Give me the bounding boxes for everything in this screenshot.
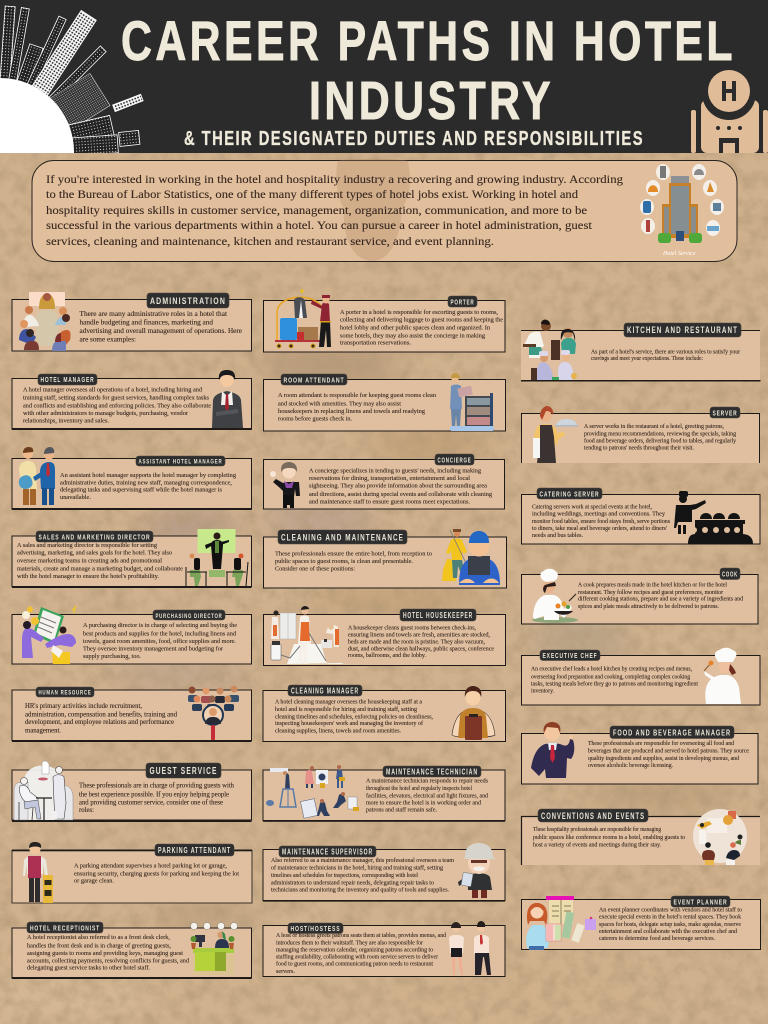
icon: meeting circle — [693, 809, 747, 865]
label — [540, 650, 600, 660]
text: A room attendant is responsible for keeping guest rooms clean — [278, 392, 437, 399]
text: training staff, setting standards for guest services, handling complex tasks — [23, 394, 210, 401]
text — [74, 863, 239, 885]
text: ensuring linens and towels are fresh, amenities are stocked, — [348, 632, 490, 639]
icon: planner with schedules — [526, 896, 596, 950]
panel: cleaning and maintenance — [264, 529, 506, 588]
icon: line-art cafe scene — [14, 761, 73, 820]
icon: meeting table — [19, 292, 71, 351]
text: and directions, assist during special events and collaborate with cleaning — [309, 491, 493, 498]
text: spaces for hosts, delegate setup tasks, make agendas, reserve — [599, 921, 741, 928]
text — [578, 582, 743, 610]
label: MAINTENANCE SUPERVISOR — [282, 848, 373, 856]
label: COOK — [722, 570, 738, 579]
text: overseeing food preparation and cooking, completing complex cooking — [531, 673, 690, 680]
panel: kitchen and restaurant — [521, 320, 760, 382]
label — [537, 488, 602, 499]
text: quality ingredients and supplies, assist in developing menus, and — [588, 755, 740, 762]
icon: cook with wok — [532, 569, 578, 623]
text: throughout the hotel and regularly inspects hotel — [366, 785, 472, 792]
text: with other administrators to manage budgets, purchasing, vendor — [23, 410, 188, 417]
text: collecting and delivering luggage to guest rooms and keeping the — [340, 316, 503, 323]
text: A cook prepares meals made in the hotel kitchen or for the hotel — [578, 582, 727, 589]
text: beverages that are produced and served to hotel patrons. They source — [588, 748, 749, 755]
panel: hotel manager — [12, 370, 252, 430]
label — [624, 323, 741, 337]
panel: maintenance technician — [263, 765, 505, 822]
text: staffing availability, collaborating with room service servers to deliver — [276, 954, 438, 961]
label: PORTER — [450, 297, 474, 306]
text: roles: — [79, 807, 94, 814]
icon: catering silhouette — [674, 491, 753, 544]
text: delegating tasks and supervising staff while the hotel manager is — [60, 487, 223, 494]
panel: guest service — [12, 761, 252, 822]
text: different cooking stations, prepare and use a variety of ingredients and — [578, 596, 743, 603]
label: HOTEL HOUSEKEEPER — [403, 611, 473, 620]
label: CLEANING MANAGER — [291, 686, 359, 696]
label: PARKING ATTENDANT — [158, 846, 231, 855]
panel: host and hostess — [263, 921, 505, 976]
icon: candidates and magnifier — [188, 686, 239, 740]
icon: technicians at work — [266, 765, 359, 818]
text: or garage clean. — [74, 878, 114, 885]
text — [348, 624, 494, 659]
text: handle budgeting and finances, marketing and — [80, 319, 214, 326]
panel: hotel housekeeper — [264, 606, 506, 666]
text — [591, 348, 740, 362]
icon: supervisor in hard hat — [458, 843, 496, 898]
label: MAINTENANCE TECHNICIAN — [386, 768, 478, 776]
panel: cook — [522, 568, 758, 624]
text: including weddings, meetings and conventions. They — [532, 511, 665, 517]
icon: manager — [212, 370, 243, 428]
label: HOST/HOSTESS — [290, 924, 340, 933]
label: EXECUTIVE CHEF — [542, 651, 598, 660]
text: cleaning timelines and schedules, enforcing policies on cleanliness, — [275, 714, 433, 721]
text: As part of a hotel's service, there are various roles to satisfy your — [591, 348, 740, 355]
label: PURCHASING DIRECTOR — [156, 613, 222, 620]
text: Catering servers work at special events at the hotel, — [532, 505, 652, 511]
label — [278, 530, 407, 544]
text — [533, 826, 685, 848]
intro text — [46, 173, 623, 248]
panel: conventions and events — [521, 809, 760, 865]
label — [400, 609, 476, 621]
label — [383, 766, 481, 777]
panel: administration — [12, 292, 252, 351]
panel: parking attendant — [12, 842, 252, 903]
text — [276, 932, 447, 975]
label — [36, 531, 153, 542]
label: CATERING SERVER — [540, 489, 600, 498]
label: ADMINISTRATION — [150, 296, 226, 307]
text: handles the front desk and is in charge of greeting guests, — [27, 942, 171, 949]
text — [584, 423, 736, 451]
text: hotel and is responsible for hiring and training staff, setting — [275, 706, 417, 713]
label: HOTEL MANAGER — [40, 375, 94, 384]
text — [309, 467, 493, 506]
text — [275, 551, 432, 572]
text: inventory. — [531, 688, 554, 694]
icon: presenter with audience — [186, 529, 248, 586]
text: advertising and overall management of operations. Here — [80, 328, 242, 335]
label — [288, 923, 343, 934]
label: HOTEL RECEPTIONIST — [30, 923, 100, 932]
panel: room attendant — [264, 373, 506, 431]
text: needs and bus tables. — [532, 533, 584, 539]
intro text: hospitality requires skills in customer service, management, organization, communication, and more to be — [46, 204, 587, 217]
text: Consider one of these positions: — [275, 565, 355, 572]
label — [281, 374, 347, 385]
text: oversee marketing teams in creating ads and promotional — [17, 558, 162, 565]
icon: hotel building — [691, 66, 768, 153]
text — [17, 542, 183, 580]
text: An executive chef leads a hotel kitchen by creating recipes and menus, — [531, 666, 692, 673]
text: public spaces like conference rooms in a hotel, enabling guests to — [533, 834, 685, 841]
text: A server works in the restaurant of a hotel, greeting patrons, — [584, 423, 724, 430]
label — [610, 726, 734, 738]
icon: housekeeping scene — [271, 606, 344, 664]
text: They oversee inventory management and budgeting for — [83, 645, 224, 652]
label — [435, 454, 474, 465]
text: execute special events in the hotel's rental spaces. They book — [599, 914, 742, 921]
text: administrators to understand repair needs, delegating repair tasks to — [271, 879, 434, 886]
text: hotel lobby and other public spaces clean and organized. In — [340, 325, 491, 332]
text: entertainment and collaborate with the executive chef and — [599, 928, 738, 935]
panel: hotel receptionist — [12, 922, 252, 979]
text: public spaces to guest rooms, is clean and presentable. — [275, 558, 413, 565]
text: tending to patrons' needs throughout their visit. — [584, 445, 694, 451]
panel: sales and marketing director — [12, 529, 252, 588]
panel: assistant hotel manager — [12, 447, 252, 510]
text: A housekeeper cleans guest rooms between check-ins, — [348, 624, 476, 631]
text: are some examples: — [80, 337, 136, 344]
text: unavailable. — [60, 494, 91, 501]
icon: hotel with service icons — [640, 164, 724, 257]
text: patrons and staff remain safe. — [366, 806, 437, 813]
label — [27, 922, 103, 933]
text: assigning guests to rooms and providing keys, managing guest — [27, 950, 183, 957]
panel: concierge — [264, 454, 504, 509]
text: A sales and marketing director is responsible for setting — [17, 542, 157, 549]
text — [366, 778, 489, 813]
icon: hotel with service icons: Hotel Service — [662, 251, 696, 257]
text: the best experience possible. If you enjoy helping people — [79, 791, 229, 798]
label — [153, 610, 225, 620]
text: servers. — [276, 968, 295, 975]
label — [155, 844, 234, 856]
text — [340, 309, 503, 347]
panel: maintenance supervisor — [263, 843, 505, 902]
label — [146, 763, 221, 778]
text: host a variety of events and meetings during their stay. — [533, 841, 661, 848]
text: administrative duties, training new staff, managing correspondence, — [60, 479, 232, 486]
header band — [0, 0, 768, 153]
text — [60, 472, 236, 501]
label — [448, 296, 477, 307]
text: and maintenance staff to ensure guest rooms meet expectations. — [309, 499, 470, 506]
label: HUMAN RESOURCE — [38, 690, 92, 697]
label: CONCIERGE — [438, 455, 472, 464]
text: beds are made and the room is pristine. They also vacuum, — [348, 638, 485, 645]
icon: waitress with cloche — [533, 406, 578, 463]
text: dust, and otherwise clean hallways, public spaces, conference — [348, 645, 494, 652]
text: ensuring security, charging guests for parking and keeping the lot — [74, 870, 239, 877]
text: towels, guest room amenities, food, office supplies and more. — [83, 638, 236, 645]
text: These professionals ensure the entire hotel, from reception to — [275, 551, 432, 558]
text: restaurant. They follow recipes and guest preferences, monitor — [578, 589, 723, 596]
title — [121, 9, 736, 131]
text: accounts, collecting payments, resolving conflicts for guests, and — [27, 957, 190, 964]
text — [599, 906, 742, 942]
text: and stocked with amenities. They may also assist — [278, 400, 401, 407]
label: CLEANING AND MAINTENANCE — [281, 532, 404, 543]
text: transportation reservations. — [340, 340, 411, 347]
text: providing menu recommendations, reviewing the specials, taking — [584, 431, 736, 437]
panel: cleaning manager — [263, 685, 506, 742]
text: A porter in a hotel is responsible for escorting guests to rooms, — [340, 309, 498, 316]
icon: porter with luggage cart — [275, 289, 331, 348]
text: cravings and meet your expectations. These include: — [591, 356, 703, 362]
text: of maintenance technicians in the hotel, hiring and training staff, setting — [271, 865, 443, 872]
label — [279, 846, 376, 857]
text: food to guest rooms, and communicating patron needs to restaurant — [276, 961, 433, 968]
text: caterers to determine food and beverage services. — [599, 935, 715, 942]
text: spices and plate meals attractively to be delivered to patrons. — [578, 604, 719, 610]
icon: host and hostess — [449, 921, 491, 975]
text: delegating guest service tasks to other hotel staff. — [27, 965, 150, 972]
text: These professionals are in charge of providing guests with — [79, 783, 235, 790]
intro text: If you're interested in working in the hotel and hospitality industry a recovering and growing industry. According — [46, 173, 623, 186]
text — [278, 392, 437, 422]
text: Also referred to as a maintenance manager, this professional oversees a team — [271, 857, 454, 864]
text: A hotel receptionist also referred to as a front desk clerk, — [27, 934, 170, 941]
icon: cleaners — [442, 529, 500, 585]
label: ROOM ATTENDANT — [284, 375, 344, 384]
text: managing the reservation calendar, organizing patrons according to — [276, 947, 433, 954]
label — [288, 685, 362, 696]
label — [720, 568, 740, 580]
text: best products and supplies for the hotel, including linens and — [83, 630, 237, 637]
text: monitor food tables, ensure food stays fresh, serve portions — [532, 518, 671, 525]
panel: executive chef — [522, 648, 760, 705]
text: supply purchasing, too. — [83, 653, 141, 660]
text: There are many administrative roles in a hotel that — [80, 311, 227, 318]
text: advertising, marketing, and sales goals for the hotel. They also — [17, 550, 172, 557]
text: An event planner coordinates with vendors and hotel staff to — [599, 906, 742, 913]
text: materials, create and manage a marketing budget, and collaborate — [17, 565, 183, 572]
panel: human resource — [12, 686, 252, 742]
label — [671, 896, 730, 907]
icon: kitchen staff — [523, 320, 577, 380]
text: These professionals are responsible for overseeing all food and — [588, 740, 735, 747]
icon: handshake with contract — [22, 605, 77, 664]
panel: event planner — [522, 896, 760, 950]
icon: city skyline on globe — [0, 6, 144, 153]
intro text: services, cleaning and maintenance, kitchen and restaurant service, and event planning. — [46, 235, 494, 248]
title: INDUSTRY — [309, 71, 554, 131]
icon: reception desk — [190, 922, 238, 975]
text — [27, 934, 190, 972]
text: technicians and monitoring the inventory and quality of tools and supplies. — [271, 886, 449, 893]
text — [275, 699, 433, 735]
panel: porter — [264, 289, 505, 352]
text: timelines and schedules for inspections, corresponding with hotel — [271, 872, 418, 879]
icon: concierge — [270, 462, 300, 508]
text — [532, 505, 671, 539]
text: administration, compensation and benefits, training and — [25, 711, 178, 718]
text — [23, 387, 211, 425]
text — [83, 622, 237, 660]
text: food and beverage orders, delivering food to tables, and regularly — [584, 437, 736, 444]
text — [79, 783, 235, 814]
label — [136, 456, 225, 466]
intro text: successful in the various departments within a hotel. You can pursue a career in hotel administration, guest — [46, 219, 593, 232]
text: A hotel manager oversees all operations of a hotel, including hiring and — [23, 387, 203, 394]
text: HR's primary activities include recruitment, — [25, 703, 142, 710]
text: relationships, inventory and sales. — [23, 418, 109, 425]
label: GUEST SERVICE — [150, 766, 218, 777]
panel: food and beverage manager — [522, 722, 758, 784]
text — [25, 703, 178, 734]
text: An assistant hotel manager supports the hotel manager by completing — [60, 472, 236, 479]
icon: two men — [19, 447, 55, 505]
text: cleaning supplies, linens, towels and room amenities. — [275, 728, 401, 735]
text: housekeepers in replacing linens and towels and readying — [278, 408, 426, 415]
label — [38, 374, 97, 385]
intro text: to the Bureau of Labor Statistics, one of the many different types of hotel jobs exist. Working in hotel and — [46, 188, 578, 201]
panel: purchasing director — [12, 605, 252, 664]
icon: attendant with sign — [23, 842, 53, 903]
text: more to ensure the hotel is in working order and — [366, 800, 482, 807]
label — [538, 809, 648, 822]
icon: attendant with cart — [450, 373, 494, 431]
text: tasks, testing meals before they go to patrons and monitoring ingredient — [531, 681, 698, 688]
text: development, and employee relations and performance — [25, 719, 174, 726]
text: A parking attendant supervises a hotel parking lot or garage, — [74, 863, 227, 870]
text: A maintenance technician responds to repair needs — [366, 778, 488, 785]
text: some hotels, they may also assist the concierge in making — [340, 332, 486, 339]
text: rooms, ballrooms, and the lobby. — [348, 652, 426, 659]
text: to diners, take meal and beverage orders, attend to diners' — [532, 526, 667, 532]
text: inspecting housekeepers' work and managing the inventory of — [275, 720, 424, 727]
text: A concierge specializes in tending to guests' needs, including making — [309, 467, 482, 474]
text: reservations for dining, transportation, entertainment and local — [309, 475, 470, 482]
label: SALES AND MARKETING DIRECTOR — [38, 532, 150, 541]
text: A purchasing director is in charge of selecting and buying the — [83, 622, 237, 629]
label: CONVENTIONS AND EVENTS — [541, 811, 645, 821]
text — [80, 311, 242, 344]
text — [271, 857, 454, 893]
text: with the hotel manager to ensure the hotel's profitability. — [17, 573, 159, 580]
panel: server — [521, 406, 760, 463]
label — [710, 407, 740, 418]
label — [147, 293, 229, 308]
panel: catering server — [522, 488, 760, 544]
label: SERVER — [712, 408, 738, 417]
label — [36, 687, 94, 697]
panel: introduction — [32, 159, 737, 262]
text: rooms before guests check in. — [278, 415, 352, 422]
text: A hotel cleaning manager oversees the housekeeping staff at a — [275, 699, 422, 706]
icon: manager with clipboard — [452, 686, 495, 740]
text: and providing customer service, consider one of these — [79, 800, 223, 807]
label: EVENT PLANNER — [674, 897, 728, 906]
text: facilities, elevators, electrical and light fixtures, and — [366, 792, 489, 799]
text: A host or hostess greets patrons seats them at tables, provides menus, and — [276, 932, 447, 939]
text: oversee alcoholic beverage licensing. — [588, 762, 673, 769]
text: These hospitality professionals are responsible for managing — [533, 826, 662, 833]
label: ASSISTANT HOTEL MANAGER — [138, 459, 222, 466]
text: management. — [25, 727, 61, 734]
text: and conflicts and establishing and enforcing policies. They also collaborate — [23, 402, 211, 409]
text — [531, 666, 698, 694]
text — [588, 740, 749, 769]
text: sightseeing. They also provide information about the surrounding area — [309, 483, 487, 490]
text: introduces them to their waitstaff. They are also responsible for — [276, 939, 423, 946]
icon: manager in suit — [531, 722, 574, 778]
icon: executive chef — [704, 648, 741, 704]
